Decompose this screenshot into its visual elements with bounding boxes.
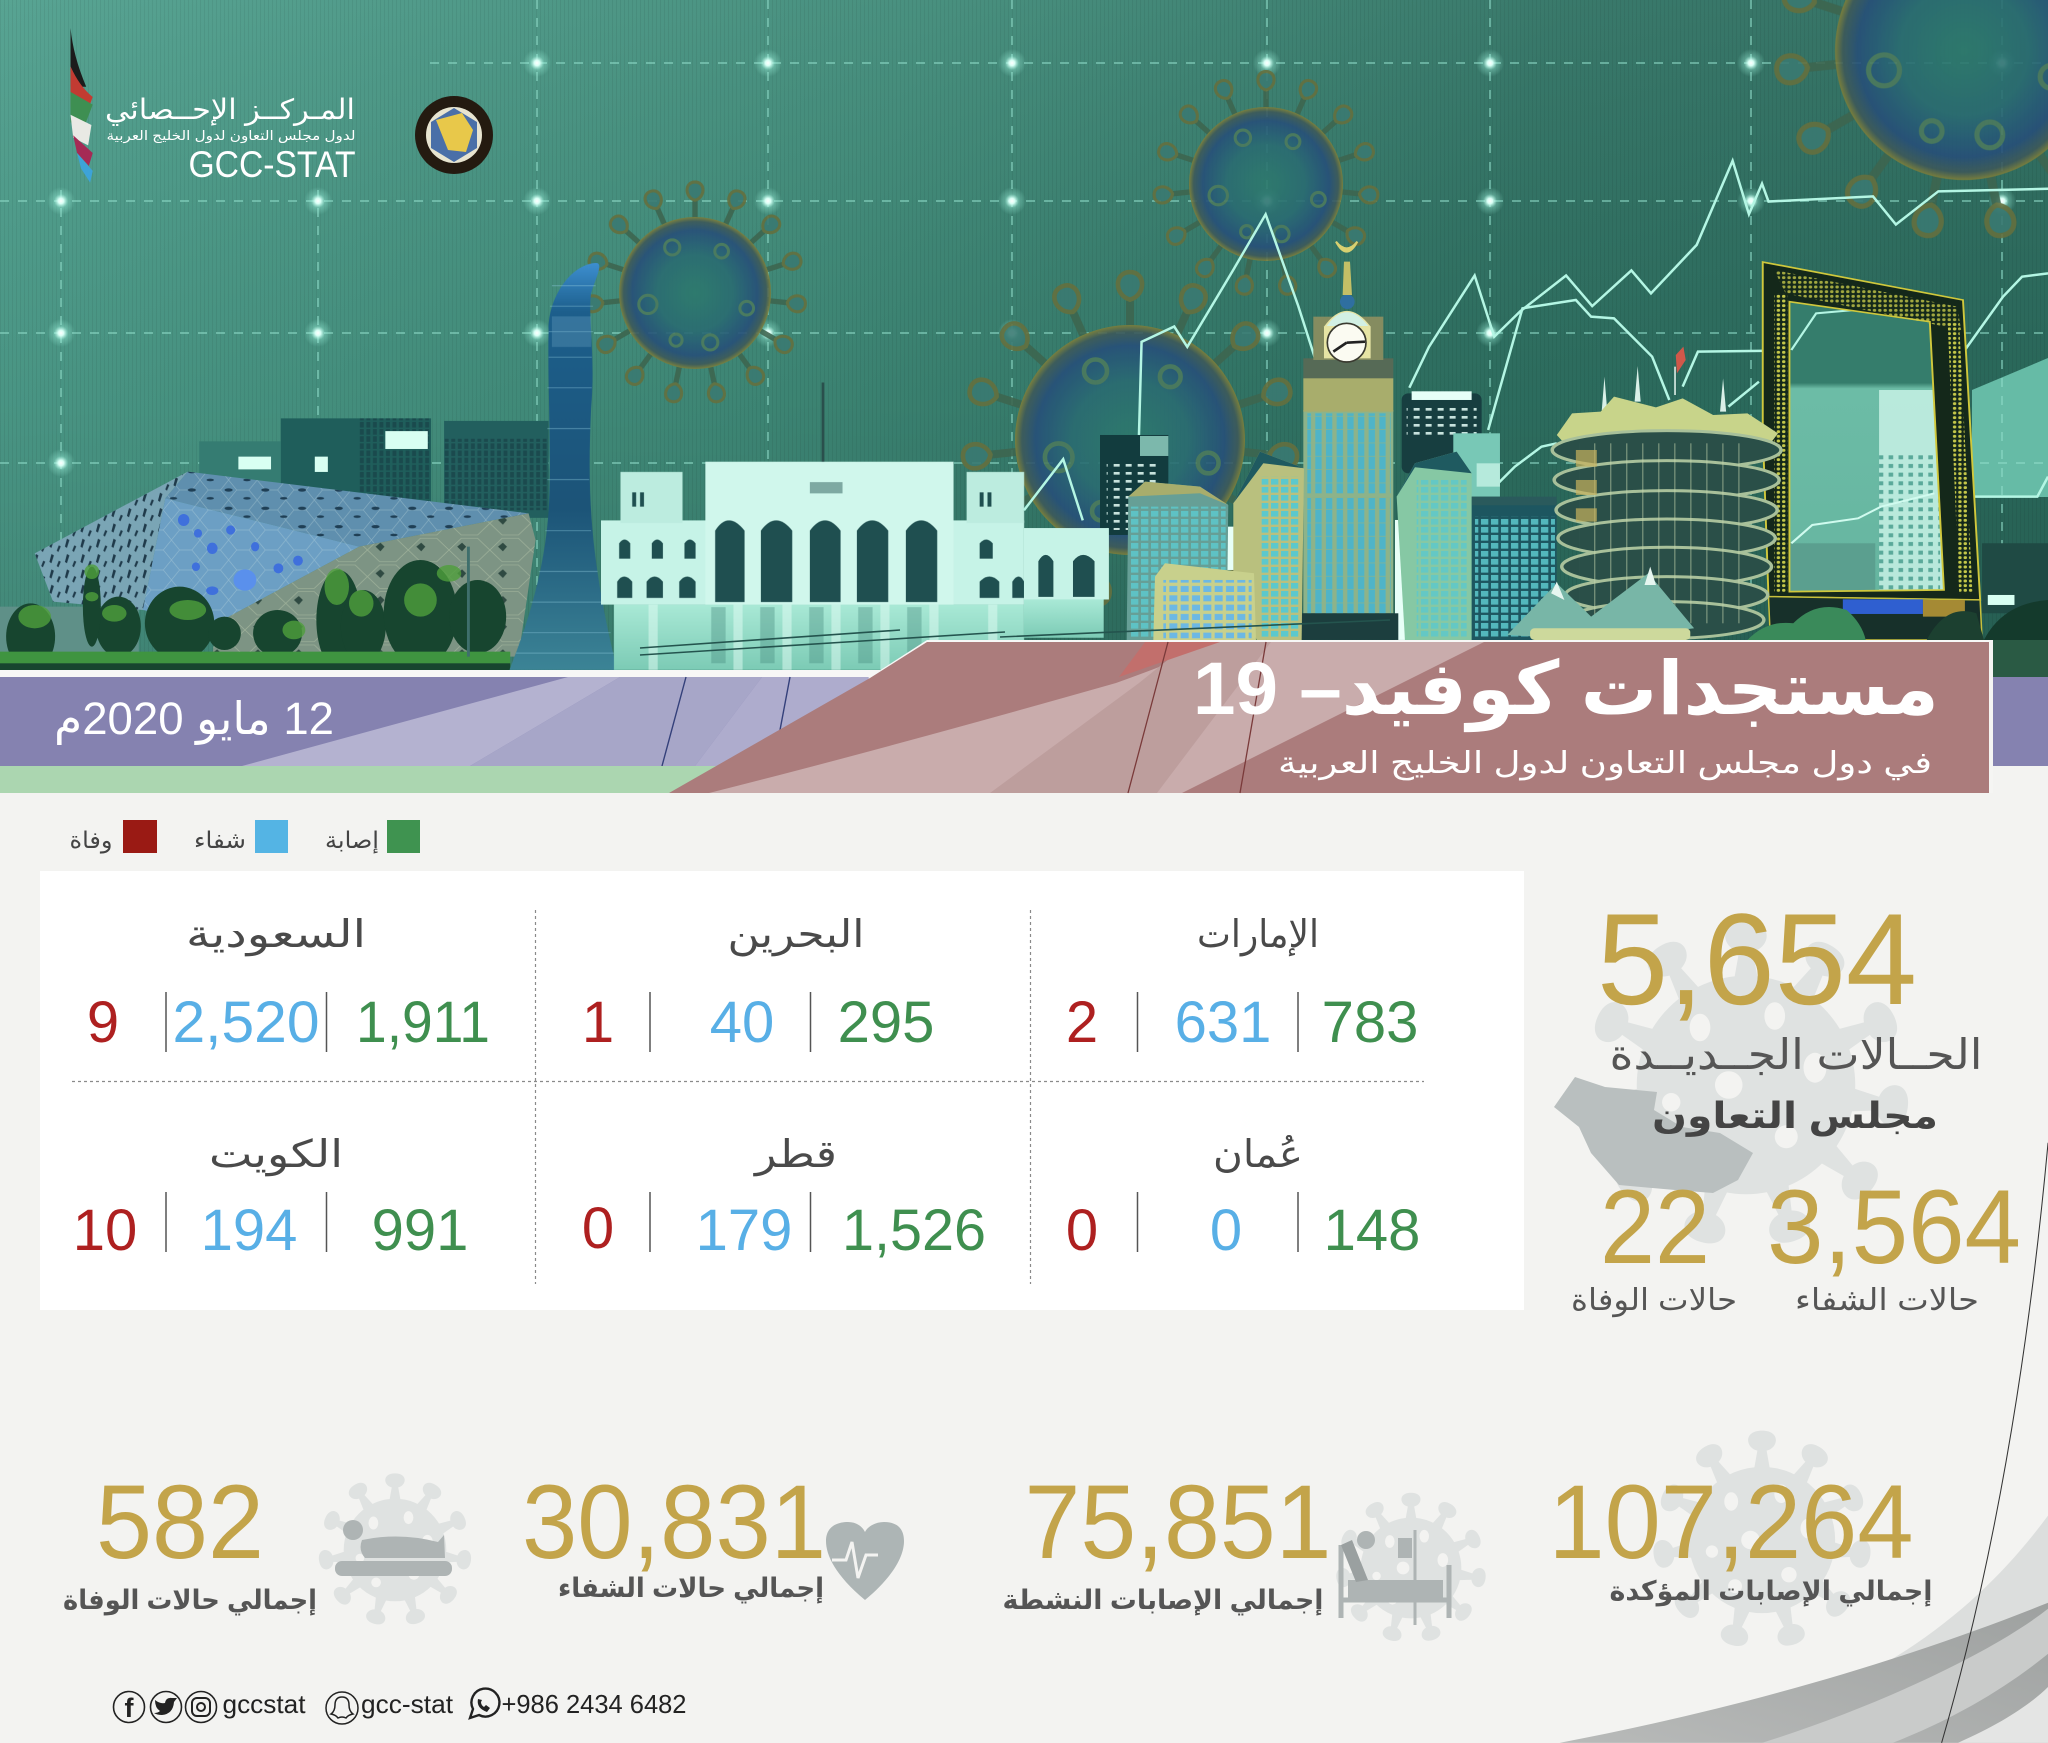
row: Kuwait: الكويت: [209, 1134, 343, 1177]
icon: heart with pulse: [826, 1522, 904, 1600]
row: Kuwait: 194: [201, 1198, 297, 1263]
legend: [70, 820, 420, 854]
logo subtitle: لدول مجلس التعاون لدول الخليج العربية: [106, 128, 356, 144]
icon: patient on drip: [1335, 1493, 1487, 1643]
stat: total confirmed: [1548, 1431, 1932, 1649]
row: UAE: 631: [1175, 990, 1271, 1055]
icon: virus: [1652, 1431, 1872, 1649]
row: Bahrain: البحرين: [728, 914, 864, 957]
row: Bahrain: [582, 914, 934, 1055]
handle: gcc-stat: gcc-stat: [361, 1689, 454, 1719]
row: Saudi Arabia: 2,520: [172, 990, 320, 1055]
Royal Opera House Muscat: [601, 383, 1024, 670]
row: Saudi Arabia: 1,911: [356, 990, 490, 1055]
Oman palace right wing: [1024, 528, 1109, 638]
logo latin name: GCC-STAT: [188, 144, 356, 185]
panel: country table: [40, 871, 1524, 1310]
panel: date ribbon: [0, 677, 2048, 793]
row: Oman: 148: [1324, 1198, 1420, 1263]
stat: total deaths: [63, 1464, 472, 1626]
icon: instagram: [186, 1692, 216, 1722]
panel: hero skyline banner: [0, 0, 2048, 677]
row: UAE: 783: [1322, 990, 1418, 1055]
row: Saudi Arabia: السعودية: [186, 914, 366, 957]
reflected cables: [640, 620, 1390, 655]
recoveries label: حالات الشفاء: [1795, 1284, 1979, 1317]
row: Oman: [1066, 1134, 1420, 1263]
icon: twitter: [150, 1692, 182, 1722]
light teal patch right of frame: [1972, 358, 2048, 497]
stat: total deaths: 582: [96, 1464, 264, 1581]
stat: total confirmed: إجمالي الإصابات المؤكدة: [1610, 1576, 1932, 1607]
stat: total recovered: إجمالي حالات الشفاء: [558, 1573, 824, 1604]
icon: whatsapp: [470, 1689, 499, 1718]
icon: facebook: f: [124, 1693, 134, 1723]
stat: total confirmed: 107,264: [1548, 1464, 1914, 1581]
strip of night lights bottom right: [1989, 640, 2048, 677]
garden trees: [0, 547, 510, 671]
title: مستجدات كوفيد– 19: [1193, 647, 1939, 733]
phone number: +986 2434 6482: [502, 1689, 686, 1719]
icon: ribbon: [71, 28, 93, 183]
deaths number: 22: [1600, 1169, 1710, 1286]
new cases number: 5,654: [1597, 886, 1917, 1032]
stat: total recovered: 30,831: [522, 1464, 826, 1581]
panel: title banner: [669, 640, 1993, 793]
legend: recovery: [194, 820, 288, 853]
stat: total active: 75,851: [1024, 1464, 1332, 1581]
chart lines: [1024, 161, 2048, 520]
row: UAE: الإمارات: [1197, 914, 1319, 957]
footer: social contacts: [114, 1689, 686, 1724]
icon: snapchat: [326, 1692, 358, 1724]
row: Qatar: قطر: [753, 1134, 837, 1177]
new cases label: الحــالات الجــديــدة: [1610, 1031, 1982, 1078]
row: UAE: [1066, 914, 1418, 1055]
row: Qatar: [582, 1134, 986, 1263]
icon: patient in bed: [318, 1473, 472, 1626]
row: Saudi Arabia: 9: [87, 990, 119, 1055]
GCC label: مجلس التعاون: [1652, 1095, 1938, 1137]
Bahrain round tower: [1507, 347, 1781, 640]
row: Oman: عُمان: [1213, 1134, 1303, 1176]
stat: total active: إجمالي الإصابات النشطة: [1002, 1585, 1324, 1616]
Kuwait opera house: [0, 472, 536, 670]
row: Kuwait: 991: [372, 1198, 468, 1263]
virus illustrations: [584, 0, 2048, 607]
row: Qatar: 1,526: [842, 1198, 986, 1263]
background city towers left: [199, 418, 549, 520]
icon: virus watermark: [1581, 922, 1911, 1248]
row: Oman: 0: [1210, 1198, 1242, 1263]
panel: new cases: [1554, 886, 2021, 1317]
Aspire tower: [509, 263, 617, 670]
row: Kuwait: 10: [73, 1198, 137, 1263]
row: Saudi Arabia: [87, 914, 490, 1055]
logo title: المـركــز الإحــصائي: [105, 94, 355, 126]
legend: infection: [325, 820, 420, 854]
legend: infection: إصابة: [325, 827, 379, 854]
row: Bahrain: 40: [710, 990, 774, 1055]
legend: death: وفاة: [70, 827, 112, 854]
row: Qatar: 0: [582, 1196, 614, 1261]
decorative swoosh: [1560, 1143, 2048, 1743]
row: Bahrain: 295: [838, 990, 934, 1055]
icon: GCC map: [1554, 1077, 1753, 1193]
row: Kuwait: [73, 1134, 468, 1263]
icon: facebook: [114, 1692, 144, 1723]
Dubai frame: [1747, 262, 2048, 640]
stat: total deaths: إجمالي حالات الوفاة: [63, 1585, 317, 1616]
hero teal background: [0, 0, 2048, 677]
icon: GCC emblem: [415, 96, 493, 174]
data grid with glowing nodes: [0, 0, 2048, 600]
white strip: [0, 670, 880, 678]
row: UAE: 2: [1066, 990, 1098, 1055]
handle: gccstat: gccstat: [222, 1689, 306, 1719]
legend: death: [70, 820, 157, 854]
row: Oman: 0: [1066, 1198, 1098, 1263]
date text: 12 مايو 2020م: [54, 693, 334, 745]
stat: total active: [1002, 1464, 1487, 1643]
logo: GCC-STAT: [71, 28, 493, 185]
row: Bahrain: 1: [582, 990, 614, 1055]
Makkah clock tower and hotels: [1100, 242, 1557, 640]
recoveries number: 3,564: [1767, 1169, 2021, 1286]
row: Qatar: 179: [696, 1198, 792, 1263]
deaths label: حالات الوفاة: [1571, 1284, 1737, 1317]
legend: recovery: شفاء: [194, 827, 246, 853]
subtitle: في دول مجلس التعاون لدول الخليج العربية: [1278, 747, 1932, 781]
